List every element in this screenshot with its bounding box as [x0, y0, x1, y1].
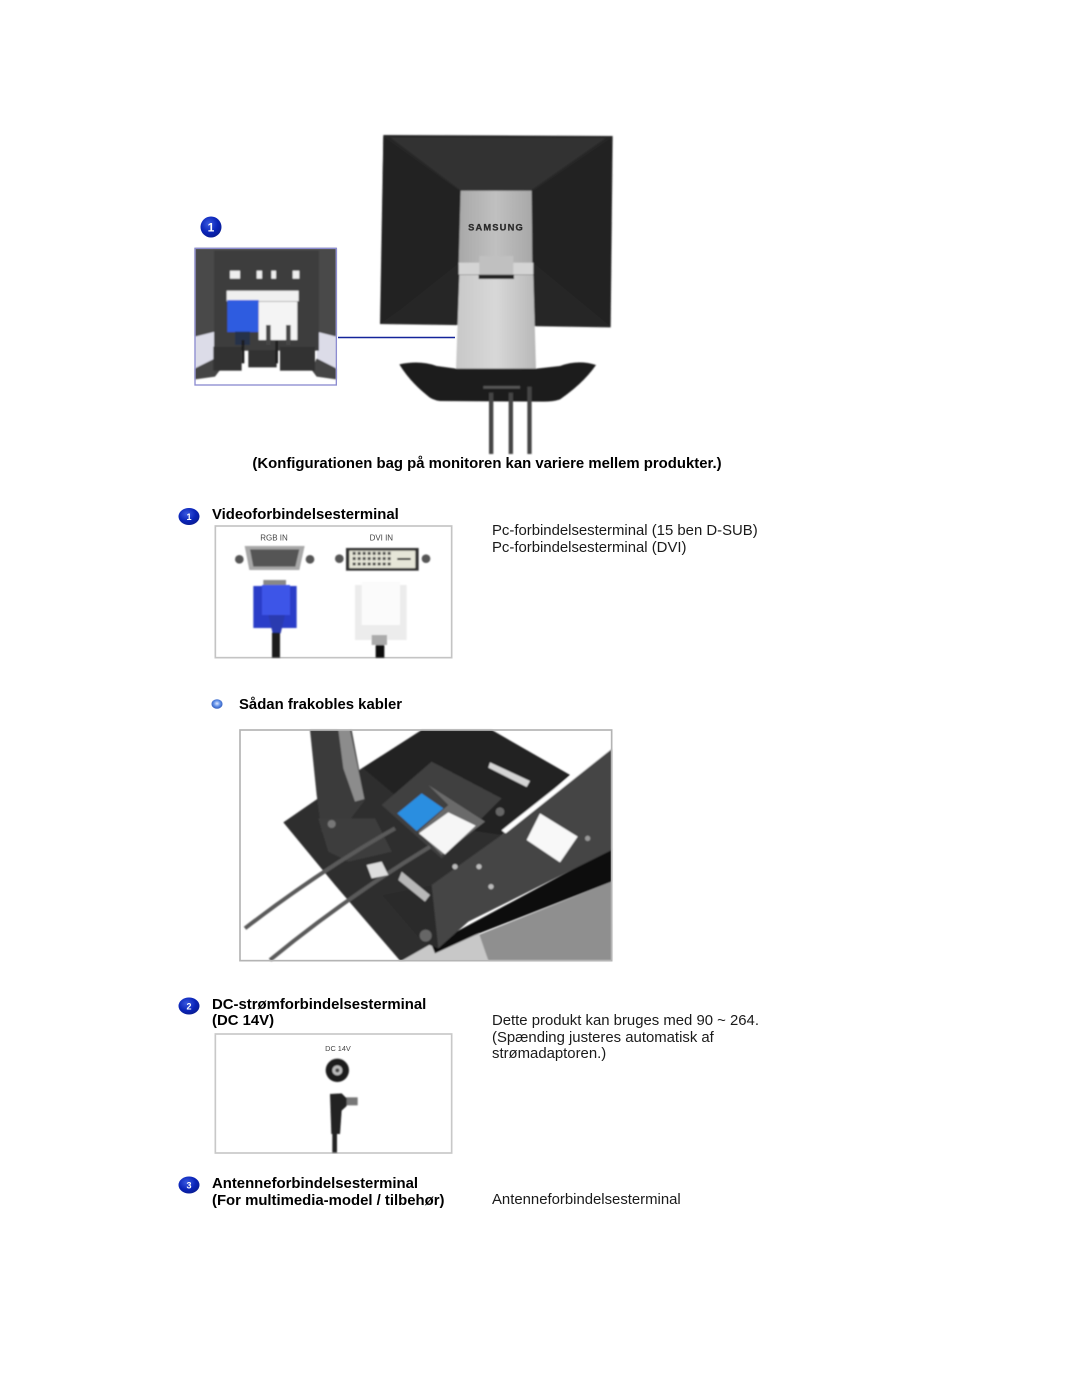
- logo text: SAMSUNG: SAMSUNG: [468, 223, 524, 233]
- heading: antenna terminal: (For multimedia-model / tilbehør): [212, 1193, 445, 1209]
- heading: how to disconnect cables: Sådan frakobles kabler: [239, 697, 402, 713]
- icon: number 2 badge: [178, 998, 200, 1014]
- icon: number 1 badge top: [200, 216, 222, 238]
- text: voltage description: strømadaptoren.): [492, 1046, 606, 1062]
- inset: rear connector panel close-up: [195, 248, 336, 385]
- icon: number 3 badge: [178, 1176, 200, 1194]
- connector line from inset to stand: [338, 336, 455, 338]
- figure: DC 14V jack and plug: [215, 1034, 452, 1153]
- heading: DC power terminal: [212, 997, 426, 1029]
- heading: DC power terminal: DC-strømforbindelsesterminal: [212, 997, 426, 1013]
- text: video terminal descriptions: [492, 523, 758, 556]
- text: antenna description: Antenneforbindelsesterminal: [492, 1192, 681, 1208]
- icon: number 3 badge: 3: [186, 1180, 192, 1190]
- heading: DC power terminal: (DC 14V): [212, 1013, 274, 1029]
- heading: antenna terminal: [212, 1176, 445, 1209]
- illustration: monitor rear view with stand: [380, 135, 613, 454]
- figure: DC 14V jack and plug: DC 14V: [325, 1044, 351, 1053]
- text: voltage description: [492, 1013, 759, 1062]
- icon: bullet for cable removal: [212, 699, 222, 709]
- figure: RGB and DVI ports with cables: DVI IN: [370, 533, 393, 542]
- heading: antenna terminal: Antenneforbindelsesterminal: [212, 1176, 418, 1192]
- text: voltage description: Dette produkt kan bruges med 90 ~ 264.: [492, 1013, 759, 1029]
- note: configuration varies: (Konfigurationen bag på monitoren kan variere mellem produkter.): [252, 456, 722, 472]
- heading: video connection terminal: Videoforbindelsesterminal: [212, 507, 399, 523]
- icon: number 1 badge: [178, 508, 200, 525]
- icon: number 1 badge top: 1: [208, 220, 215, 234]
- icon: number 1 badge: 1: [186, 512, 192, 522]
- text: voltage description: (Spænding justeres automatisk af: [492, 1030, 715, 1046]
- icon: number 2 badge: 2: [186, 1002, 192, 1012]
- photo: disconnecting cables: [240, 730, 612, 961]
- text: video terminal descriptions: Pc-forbindelsesterminal (15 ben D-SUB): [492, 523, 758, 539]
- figure: RGB and DVI ports with cables: RGB IN: [260, 533, 288, 542]
- figure: RGB and DVI ports with cables: [215, 526, 452, 658]
- text: video terminal descriptions: Pc-forbindelsesterminal (DVI): [492, 540, 687, 556]
